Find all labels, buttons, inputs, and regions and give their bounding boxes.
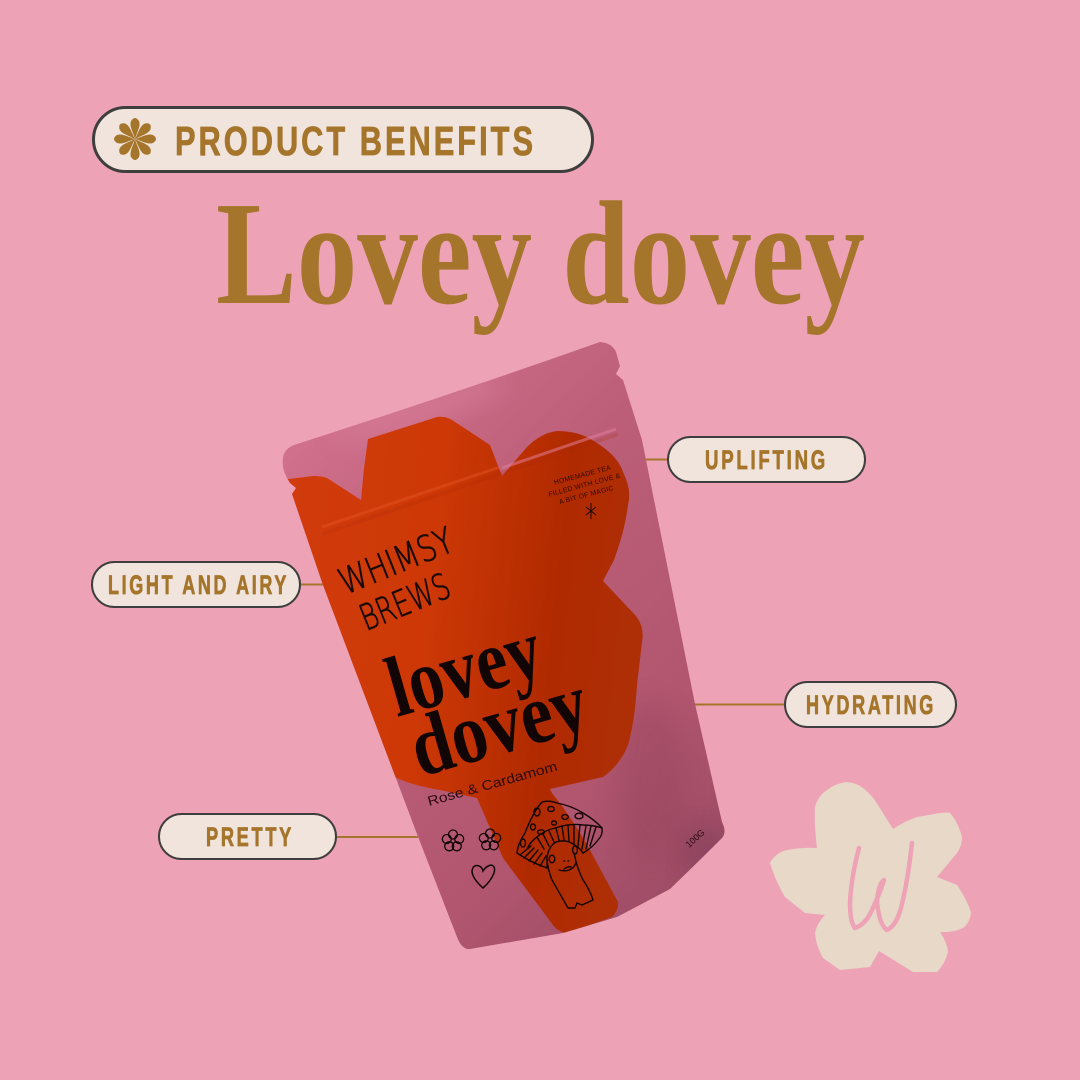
tagline: FILLED WITH LOVE &: [548, 473, 621, 499]
connector: uplifting: [638, 458, 668, 460]
product name: lovey: lovey: [376, 600, 552, 735]
label pill: hydrating: HYDRATING: [806, 690, 936, 720]
label pill: light and airy: LIGHT AND AIRY: [108, 570, 289, 600]
tagline: HOMEMADE TEA: [553, 465, 612, 487]
product pouch: [280, 342, 730, 949]
flavour text: Rose & Cardamom: [426, 759, 559, 809]
icon: flower right: [479, 829, 501, 850]
pouch shading: [329, 367, 730, 878]
brand name: whimsy brews: WHIMSY: [333, 520, 460, 603]
icon: small star: [586, 503, 596, 519]
tagline: [548, 465, 621, 506]
connector: hydrating: [692, 704, 785, 706]
title: Lovey dovey: [216, 172, 865, 336]
icon: flower left: [442, 830, 464, 851]
pouch body: [283, 342, 724, 949]
flower shape: [770, 782, 971, 972]
brand flower logo: [770, 782, 971, 972]
brand name: whimsy brews: [333, 520, 460, 639]
zipper band: [322, 429, 618, 534]
label pill: uplifting: UPLIFTING: [705, 445, 828, 475]
label pill: hydrating: [785, 682, 956, 727]
weight text: 100G: [684, 827, 707, 849]
letter W: [850, 843, 912, 930]
brand name: whimsy brews: BREWS: [354, 566, 457, 639]
red shape: [280, 417, 643, 933]
product name: dovey: dovey: [399, 653, 598, 795]
connector: light and airy: [300, 584, 326, 586]
label pill: pretty: PRETTY: [206, 822, 294, 852]
icon: flower asterisk: [114, 118, 156, 160]
tagline: A BIT OF MAGIC: [559, 485, 615, 506]
icon: heart: [472, 865, 495, 888]
label pill: light and airy: [92, 562, 300, 607]
heading text: PRODUCT BENEFITS: [175, 118, 536, 164]
heading pill: product benefits: [94, 108, 592, 172]
icon: mushroom character: [517, 801, 602, 908]
connector: pretty: [336, 836, 418, 838]
label pill: pretty: [159, 814, 336, 859]
label pill: uplifting: [668, 437, 865, 482]
